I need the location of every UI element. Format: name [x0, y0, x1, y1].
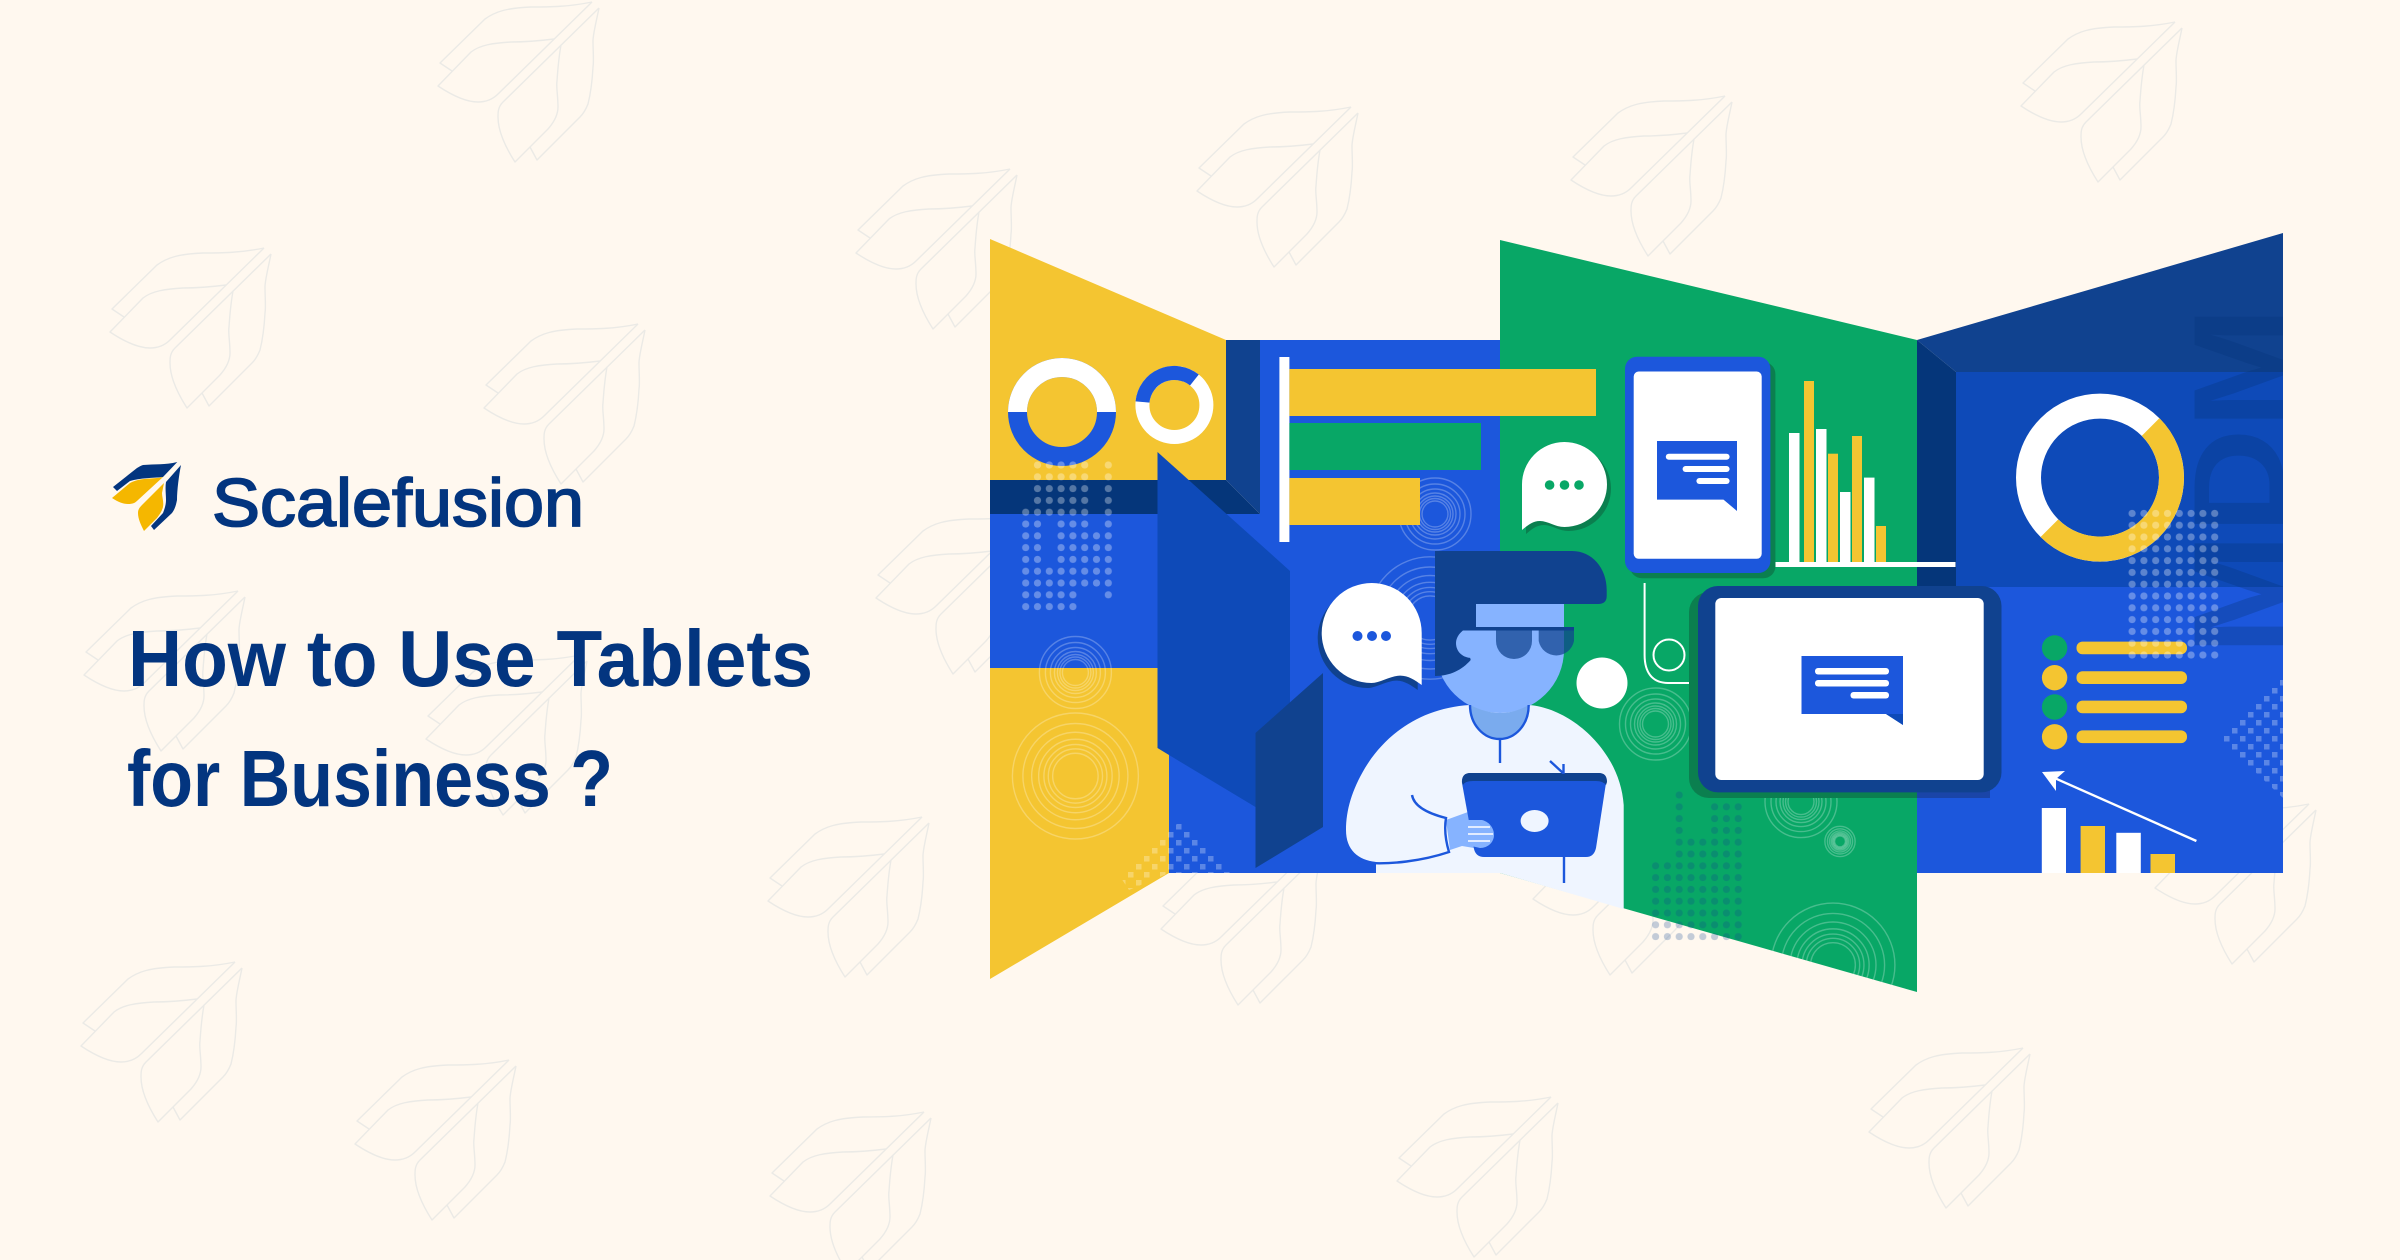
panel: left yellow and blue wall — [990, 239, 1500, 979]
connector line and ring — [1645, 583, 1691, 683]
dot grid: left wall — [1020, 459, 1114, 612]
watermark text MDM: MDM — [2166, 307, 2312, 655]
building shape: navy — [1256, 673, 1323, 868]
face — [1436, 604, 1564, 713]
rings: left wall large — [1012, 713, 1138, 839]
dot grid: green wall — [1650, 789, 1744, 942]
rings: green wall — [1618, 687, 1896, 985]
donut chart: white and yellow — [2028, 406, 2172, 549]
message icon — [1657, 441, 1737, 511]
neck outline — [1470, 705, 1529, 763]
title: for Business ? — [127, 734, 613, 823]
dot grid: right wall — [2126, 508, 2221, 661]
panel: right blue wall — [1917, 233, 2283, 873]
rings: behind bar — [1399, 478, 1471, 550]
tablet — [1462, 773, 1606, 857]
title — [127, 614, 813, 823]
building shape: blue — [1158, 452, 1290, 807]
person — [1346, 551, 1624, 909]
sleeve outline — [1358, 795, 1449, 863]
rings: behind speech bubble — [1369, 557, 1491, 679]
column chart — [1776, 381, 1956, 567]
hand over tablet — [1467, 820, 1494, 848]
neck — [1470, 705, 1529, 739]
panel: green wall — [1500, 240, 1917, 992]
sunglasses — [1463, 627, 1574, 659]
shirt — [1346, 705, 1624, 909]
diamond dots: right wall — [2218, 675, 2283, 798]
horizontal bar chart — [1279, 357, 1596, 542]
hand — [1446, 812, 1492, 850]
title: How to Use Tablets — [128, 614, 813, 703]
logo mark — [112, 462, 181, 531]
donut chart: half blue — [1018, 368, 1106, 456]
speech bubble: green dots — [1522, 442, 1611, 534]
message icon — [1802, 656, 1903, 725]
list with bullets — [2042, 635, 2187, 750]
rings: left wall small — [1039, 636, 1111, 708]
brand name: Scalefusion — [212, 465, 584, 541]
ear — [1456, 629, 1479, 658]
small column chart — [2042, 808, 2175, 873]
donut chart: small — [1142, 373, 1206, 437]
speech bubble: blue dots — [1318, 583, 1422, 690]
arrow — [2042, 771, 2196, 841]
landscape tablet — [1689, 586, 2002, 798]
diamond dots: left wall — [1121, 820, 1234, 890]
hair — [1435, 551, 1607, 676]
small lines — [1550, 761, 1564, 883]
white circle — [1576, 658, 1628, 708]
fingers — [1468, 827, 1493, 841]
portrait tablet — [1625, 357, 1775, 578]
tablet camera — [1521, 810, 1549, 832]
